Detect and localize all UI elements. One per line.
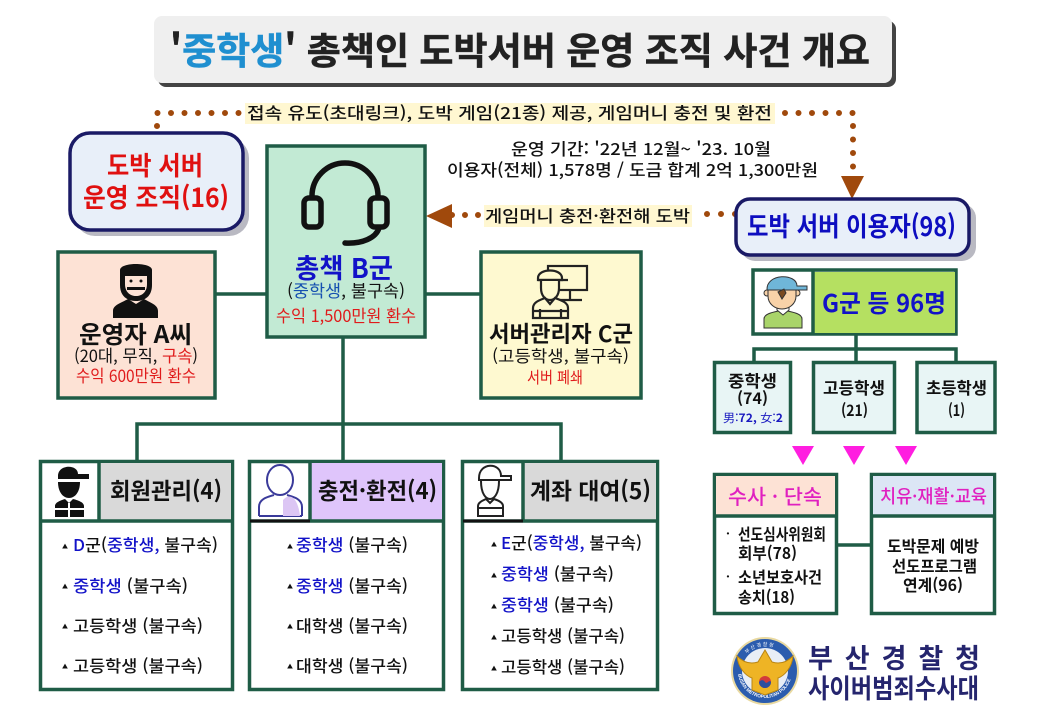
icon: worker with cap [55,467,89,517]
panel: charging and exchange: 대학생 (불구속) [296,653,408,677]
panel: chief B [267,146,425,337]
text: operating period and totals: 운영 기간: '22년 12월~ '23. 10월 [511,136,771,160]
text: Busan police cyber crime unit [808,637,980,706]
panel: account lending: 고등학생 (불구속) [501,623,625,647]
panel: charging and exchange: 중학생 (불구속) [296,532,408,556]
icon: police emblem: 부 산 경 찰 청 [744,642,774,653]
panel: gambling server organisation [70,133,249,236]
arrow: operators to users, dotted [157,113,864,199]
panel: charging and exchange: 충전·환전(4) [318,472,437,506]
panel: G and 96 users [753,270,956,334]
panel: account lending: ▲ [491,540,497,549]
panel: account lending: ▲ [491,571,497,580]
panel: operator A [58,252,215,398]
text: operating period and totals: 이용자(전체) 1,578명 / 도금 합계 2억 1,300만원 [447,157,818,181]
panel: elementary schoolers: (1) [948,399,965,421]
panel: account lending: ▲ [491,602,497,611]
panel: investigation and crackdown: · [726,525,730,542]
text: Busan police cyber crime unit: 사이버범죄수사대 [808,667,979,706]
connector lines [137,294,956,545]
text: Busan police cyber crime unit: 부 산 경 찰 청 [808,637,980,676]
panel: chief B: 총책 B군 [295,247,393,286]
panel: healing, rehabilitation, education: 치유·재활·교육 [880,483,987,509]
panel: account lending: ▲ [491,633,497,642]
panel: investigation and crackdown: 소년보호사건 [738,564,822,588]
panel: gambling server users [736,199,976,261]
panel: investigation and crackdown: 선도심사위원회 [738,521,826,545]
panel: charging and exchange: 대학생 (불구속) [296,613,408,637]
panel: member management: 고등학생 (불구속) [73,613,203,637]
panel: account lending: ▲ [491,664,497,673]
panel: healing, rehabilitation, education [871,474,995,614]
panel: operator A: (20대, 무직, 구속) [74,342,198,367]
panel: high schoolers: 고등학생 [823,375,885,399]
panel: member management: ▲ [62,622,68,631]
panel: member management: 회원관리(4) [110,472,222,506]
panel: charging and exchange: ▲ [287,662,293,671]
panel: account lending: 고등학생 (불구속) [501,654,625,678]
panel: member management: ▲ [62,662,68,671]
panel: investigation and crackdown: · [726,568,730,585]
panel: member management [40,461,233,690]
panel: account lending: E군(중학생, 불구속) [501,530,642,554]
arrow: users to B, dotted [426,204,735,228]
panel: healing, rehabilitation, education: 선도프로그램 [892,553,977,577]
panel: gambling server users: 도박 서버 이용자(98) [747,205,956,244]
icon: police emblem: BUSAN METROPOLITAN POLICE [738,674,790,698]
panel: gambling server organisation: 운영 조직(16) [83,178,229,215]
panel: middle schoolers: (74) [737,387,768,409]
icon: operator man [113,264,158,318]
panel: server manager C: 서버관리자 C군 [489,317,633,349]
panel: account lending: 중학생 (불구속) [501,561,614,585]
icon: technician with monitor [533,266,587,318]
label: service provided: 접속 유도(초대링크), 도박 게임(21종) 제공, 게임머니 충전 및 환전 [247,100,772,124]
panel: gambling server organisation: 도박 서버 [107,146,203,183]
panel: healing, rehabilitation, education: 연계(96) [903,572,963,596]
panel: server manager C: (고등학생, 불구속) [492,343,629,367]
panel: member management: D군(중학생, 불구속) [73,532,218,556]
panel: middle schoolers: 男:72, 女:2 [723,410,783,426]
panel: member management: 고등학생 (불구속) [73,653,203,677]
panel: member management: ▲ [62,582,68,591]
panel: charging and exchange: ▲ [287,542,293,551]
panel: healing, rehabilitation, education: 도박문제 예방 [887,533,979,557]
icon: worker outline [478,466,511,516]
title banner: '중학생' 총책인 도박서버 운영 조직 사건 개요 [170,21,870,75]
panel: account lending: 중학생 (불구속) [501,592,614,616]
panel: investigation and crackdown: 수사 · 단속 [728,480,822,510]
panel: high schoolers [814,362,894,432]
icon: person outline [259,465,302,516]
panel: account lending [462,461,659,690]
panel: charging and exchange: 중학생 (불구속) [296,573,408,597]
panel: middle schoolers: 중학생 [728,368,777,392]
icon: police emblem [731,637,799,705]
icon: magenta down arrows [792,446,917,465]
panel: middle schoolers [714,362,790,432]
panel: account lending: 계좌 대여(5) [530,472,651,506]
panel: chief B: 수익 1,500만원 환수 [276,302,416,327]
panel: elementary schoolers: 초등학생 [926,375,987,399]
panel: member management: ▲ [62,542,68,551]
panel: investigation and crackdown: 송치(18) [738,584,795,608]
label: game money: 게임머니 충전·환전해 도박 [485,203,690,227]
panel: charging and exchange: ▲ [287,622,293,631]
panel: investigation and crackdown [714,474,837,614]
icon: headset [304,163,387,243]
panel: charging and exchange: ▲ [287,582,293,591]
panel: investigation and crackdown: 회부(78) [738,540,797,564]
panel: server manager C [481,252,641,398]
panel: operator A: 수익 600만원 환수 [76,362,196,387]
panel: elementary schoolers [917,362,995,432]
panel: operator A: 운영자 A씨 [79,315,192,350]
panel: chief B: (중학생, 불구속) [287,277,405,302]
panel: member management: 중학생 (불구속) [73,573,188,597]
panel: G and 96 users: G군 등 96명 [822,285,946,320]
text: operating period and totals [447,136,818,181]
panel: charging and exchange [249,461,445,690]
icon: boy with cap [764,277,807,328]
panel: server manager C: 서버 폐쇄 [527,364,583,388]
panel: high schoolers: (21) [841,399,868,421]
